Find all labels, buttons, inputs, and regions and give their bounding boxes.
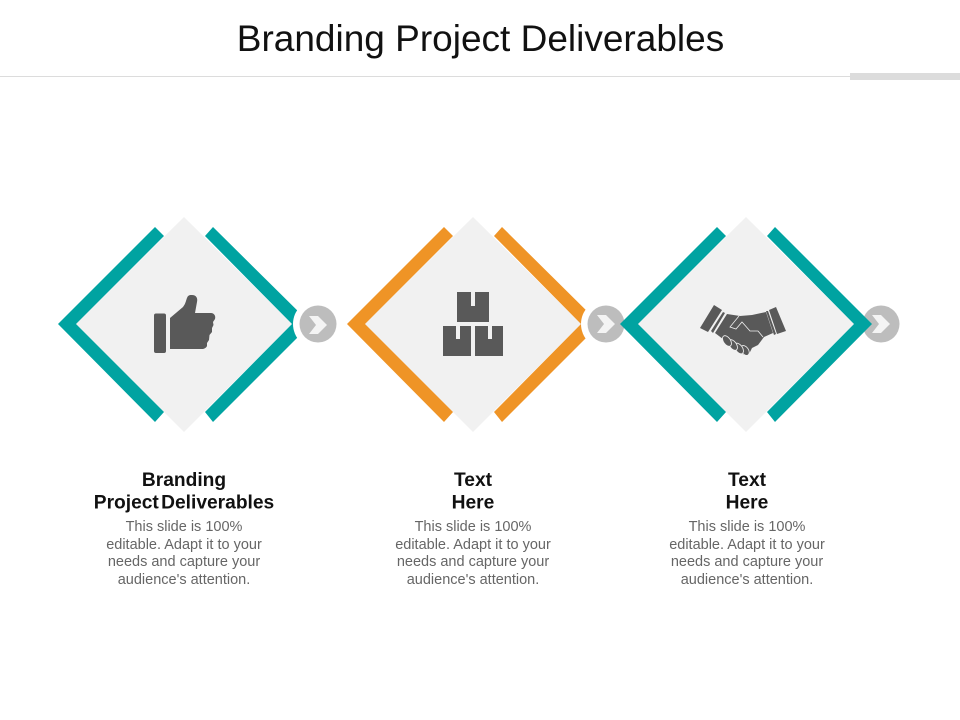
step 2: diamond with boxes — [347, 217, 631, 432]
text block 3: This slide is 100% — [689, 519, 806, 535]
text block 3: Here — [726, 492, 769, 514]
text block 1: needs and capture your — [108, 554, 260, 570]
teal chevron right 1 — [205, 227, 311, 422]
title: Branding Project Deliverables — [237, 18, 724, 59]
text block 3: Text — [728, 470, 767, 491]
step 1: diamond with thumbs-up — [58, 217, 343, 432]
text block 2 — [395, 470, 551, 588]
text block 1: editable. Adapt it to your — [106, 537, 262, 553]
text block 3 — [669, 470, 825, 588]
text block 1: Project Deliverables — [94, 492, 274, 514]
step 3: diamond with handshake — [620, 217, 900, 432]
icon: handshake — [700, 305, 786, 357]
icon: thumbs up — [154, 295, 215, 353]
arrow button 3 — [862, 306, 900, 342]
teal chevron left 1 — [58, 227, 164, 422]
arrow button 2 — [581, 299, 631, 349]
icon: stacked boxes — [443, 292, 503, 356]
teal chevron right 3 — [767, 227, 872, 422]
text block 2: Text — [454, 470, 493, 491]
teal chevron left 3 — [620, 227, 726, 422]
orange chevron right 2 — [494, 227, 600, 422]
orange chevron left 2 — [347, 227, 453, 422]
text block 1: audience's attention. — [118, 572, 250, 588]
text block 2: This slide is 100% — [415, 519, 532, 535]
gray diamond 3 — [638, 217, 854, 432]
arrow button 1 — [293, 299, 343, 349]
text block 1: This slide is 100% — [126, 519, 243, 535]
text block 2: editable. Adapt it to your — [395, 537, 551, 553]
gray diamond 2 — [365, 217, 581, 432]
text block 2: Here — [452, 492, 495, 514]
text block 1 — [94, 470, 274, 588]
text block 1: Branding — [142, 470, 226, 491]
gray diamond 1 — [76, 217, 292, 432]
text block 2: needs and capture your — [397, 554, 549, 570]
text block 2: audience's attention. — [407, 572, 539, 588]
text block 3: needs and capture your — [671, 554, 823, 570]
text block 3: audience's attention. — [681, 572, 813, 588]
text block 3: editable. Adapt it to your — [669, 537, 825, 553]
